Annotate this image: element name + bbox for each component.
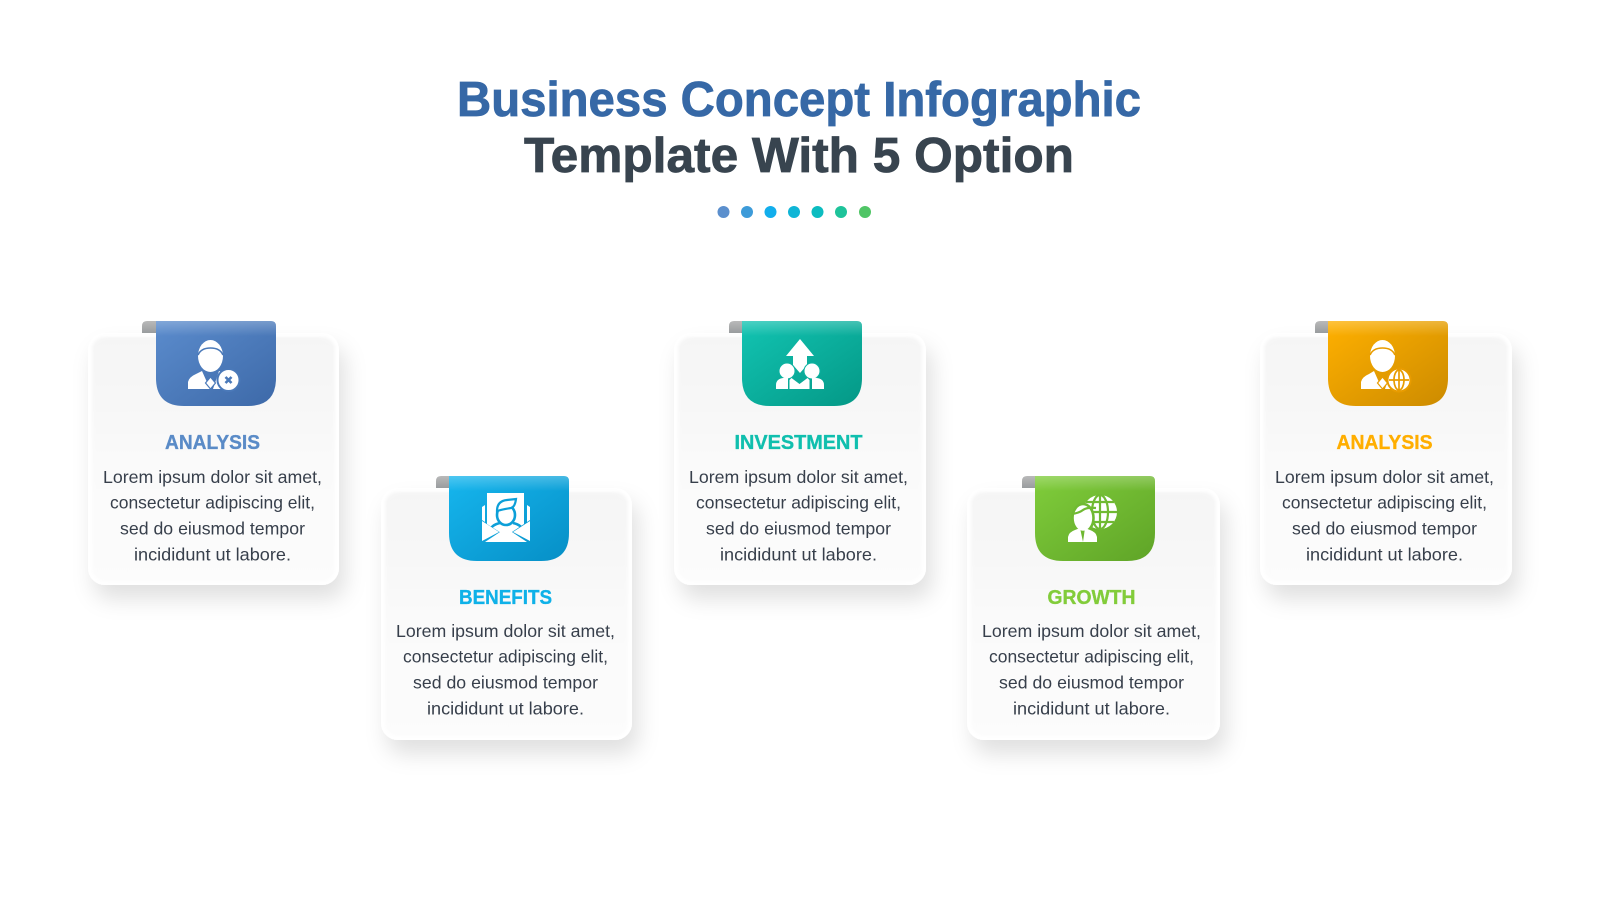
heading: analysis global: ANALYSIS <box>1336 431 1432 454</box>
dotted divider <box>718 206 871 218</box>
ribbon tab: benefits <box>436 476 569 561</box>
panel: growth <box>967 476 1220 740</box>
panel: investment <box>674 321 926 585</box>
body text: investment: sed do eiusmod tempor <box>706 518 891 538</box>
body text: growth: sed do eiusmod tempor <box>999 672 1184 692</box>
heading: growth: GROWTH <box>1048 586 1136 609</box>
body text: analysis <box>103 467 322 564</box>
body text: analysis global: Lorem ipsum dolor sit amet, <box>1275 467 1494 487</box>
ribbon tab: analysis global <box>1315 321 1448 406</box>
body text: analysis global: sed do eiusmod tempor <box>1292 518 1477 538</box>
heading: investment: INVESTMENT <box>734 431 863 454</box>
body text: investment: consectetur adipiscing elit, <box>696 492 901 512</box>
body text: benefits <box>396 621 615 718</box>
body text: benefits: sed do eiusmod tempor <box>413 672 598 692</box>
icon: person with globe <box>1068 495 1117 542</box>
body text: growth <box>982 621 1201 718</box>
body text: analysis: incididunt ut labore. <box>134 544 291 564</box>
body text: analysis global <box>1275 467 1494 564</box>
panel: analysis <box>88 321 339 585</box>
title line 1: Business Concept Infographic <box>457 73 1141 127</box>
body text: benefits: consectetur adipiscing elit, <box>403 646 608 666</box>
title <box>457 73 1141 183</box>
icon: person with small globe <box>1361 340 1410 392</box>
body text: growth: incididunt ut labore. <box>1013 698 1170 718</box>
icon: team with up arrow <box>776 339 824 389</box>
body text: growth: consectetur adipiscing elit, <box>989 646 1194 666</box>
body text: investment: Lorem ipsum dolor sit amet, <box>689 467 908 487</box>
body text: benefits: incididunt ut labore. <box>427 698 584 718</box>
body text: investment <box>689 467 908 564</box>
body text: analysis global: incididunt ut labore. <box>1306 544 1463 564</box>
body text: analysis: sed do eiusmod tempor <box>120 518 305 538</box>
ribbon tab: investment <box>729 321 862 406</box>
heading: benefits: BENEFITS <box>459 586 552 609</box>
icon: doctor with badge <box>188 340 240 391</box>
heading: analysis: ANALYSIS <box>165 431 260 454</box>
body text: benefits: Lorem ipsum dolor sit amet, <box>396 621 615 641</box>
title line 2: Template With 5 Option <box>524 129 1074 183</box>
panel: analysis global <box>1260 321 1512 585</box>
body text: analysis: Lorem ipsum dolor sit amet, <box>103 467 322 487</box>
panel: benefits <box>381 476 632 740</box>
body text: investment: incididunt ut labore. <box>720 544 877 564</box>
body text: analysis: consectetur adipiscing elit, <box>110 492 315 512</box>
body text: analysis global: consectetur adipiscing elit, <box>1282 492 1487 512</box>
ribbon tab: analysis <box>142 321 276 406</box>
icon: envelope with person <box>482 493 530 542</box>
body text: growth: Lorem ipsum dolor sit amet, <box>982 621 1201 641</box>
ribbon tab: growth <box>1022 476 1155 561</box>
